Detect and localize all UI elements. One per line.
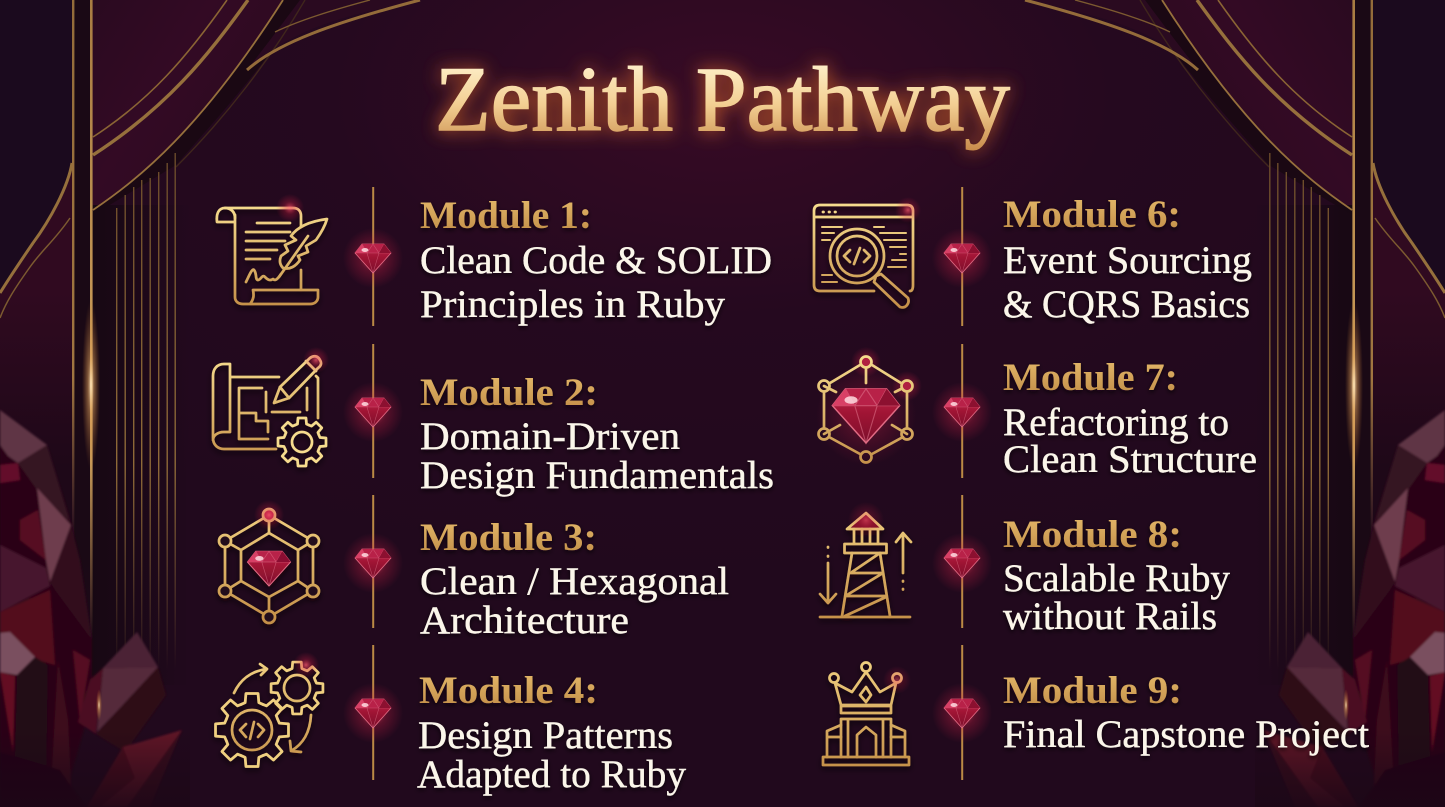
module 3 text: Module 3: bbox=[420, 516, 597, 559]
module 3 text: Clean / Hexagonal bbox=[420, 560, 729, 603]
module 4 text bbox=[417, 669, 687, 796]
module 8 text: Scalable Ruby bbox=[1003, 557, 1230, 600]
left side strip bbox=[0, 0, 72, 320]
icon highlights bbox=[254, 194, 921, 694]
icon: gears with code bbox=[216, 662, 323, 766]
module 1 text bbox=[420, 194, 772, 326]
divider with ruby bbox=[343, 645, 403, 780]
module 7 text: Refactoring to bbox=[1003, 401, 1229, 444]
module 8 text: without Rails bbox=[1003, 595, 1217, 638]
module 2 text bbox=[420, 371, 774, 497]
module 1 text: Clean Code & SOLID bbox=[420, 239, 772, 282]
left curtain and crystals bbox=[0, 0, 420, 807]
title: Zenith Pathway bbox=[435, 48, 1010, 150]
module 8 row bbox=[820, 495, 1230, 638]
module 6 row bbox=[814, 187, 1252, 326]
module 8 text bbox=[1003, 513, 1230, 638]
module 8 text: Module 8: bbox=[1003, 513, 1182, 556]
icon: large ruby in node hexagon bbox=[816, 347, 922, 465]
module 2 text: Module 2: bbox=[420, 371, 598, 414]
module 4 row bbox=[216, 645, 687, 796]
module 6 text: & CQRS Basics bbox=[1003, 283, 1250, 326]
module 7 text: Module 7: bbox=[1003, 356, 1178, 399]
module 9 text bbox=[1003, 669, 1369, 756]
module 7 row bbox=[816, 344, 1257, 481]
module 6 text: Event Sourcing bbox=[1003, 239, 1252, 282]
divider with ruby bbox=[343, 495, 403, 628]
module 1 text: Module 1: bbox=[420, 194, 592, 237]
module 7 text bbox=[1003, 356, 1257, 481]
title: Zenith Pathway bbox=[435, 48, 1010, 150]
module 1 row bbox=[217, 187, 772, 326]
module 9 text: Module 9: bbox=[1003, 669, 1182, 712]
module 3 text bbox=[420, 516, 729, 642]
icon: hexagon architecture with ruby bbox=[219, 509, 319, 623]
icon: scroll and quill bbox=[217, 208, 327, 304]
module 4 text: Adapted to Ruby bbox=[417, 753, 687, 796]
icon: lighthouse with up and down arrows bbox=[820, 513, 911, 617]
module 3 text: Architecture bbox=[420, 599, 629, 642]
module 4 text: Design Patterns bbox=[418, 714, 673, 757]
right curtain and crystals bbox=[1025, 0, 1445, 807]
module 6 text bbox=[1003, 193, 1252, 326]
divider with ruby bbox=[932, 187, 992, 326]
module 7 text: Clean Structure bbox=[1003, 438, 1257, 481]
divider with ruby bbox=[343, 344, 403, 478]
icon: code window and magnifier bbox=[814, 205, 913, 307]
module 2 text: Design Fundamentals bbox=[420, 454, 774, 497]
module 2 text: Domain-Driven bbox=[420, 415, 680, 458]
right side strip bbox=[1373, 0, 1445, 320]
module 9 text: Final Capstone Project bbox=[1003, 713, 1369, 756]
module 9 row bbox=[823, 645, 1369, 780]
module 1 text: Principles in Ruby bbox=[420, 283, 726, 326]
module 3 row bbox=[219, 495, 729, 642]
module 4 text: Module 4: bbox=[419, 669, 598, 712]
divider with ruby bbox=[343, 187, 403, 326]
icon: blueprint, pencil and gear bbox=[213, 356, 326, 466]
module 6 text: Module 6: bbox=[1003, 193, 1181, 236]
divider with ruby bbox=[932, 344, 992, 478]
divider with ruby bbox=[932, 645, 992, 780]
module 2 row bbox=[213, 344, 774, 497]
icon: crown over temple bbox=[823, 662, 909, 765]
divider with ruby bbox=[932, 495, 992, 628]
